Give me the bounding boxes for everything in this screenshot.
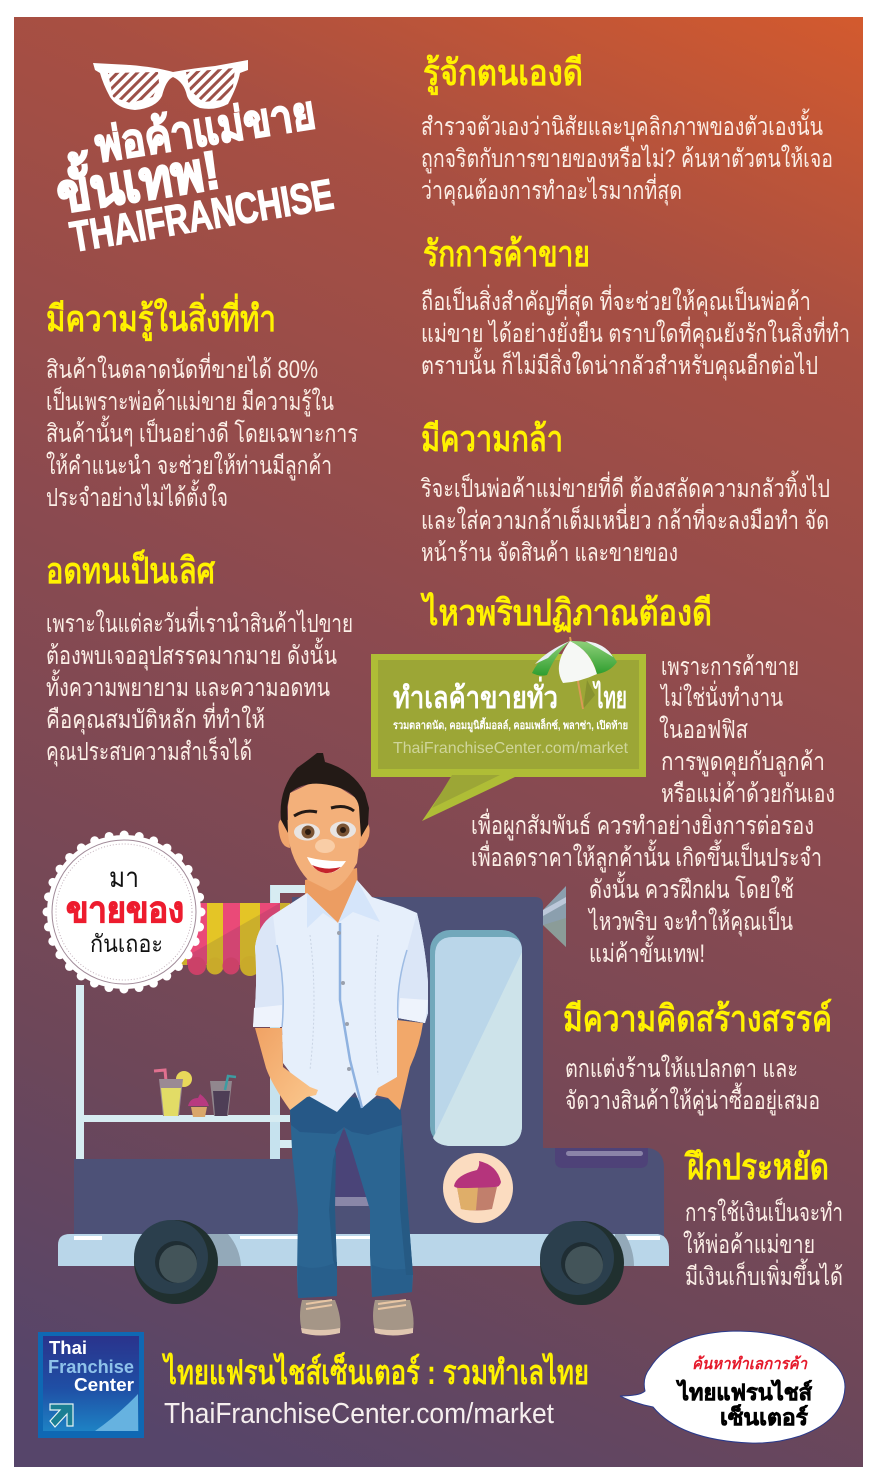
speech bubble ad: ทำเลค้าขายทั่ว	[393, 676, 558, 715]
section: ไหวพริบปฏิภาณต้องดี: การพูดคุยกับลูกค้า	[661, 748, 825, 777]
section: รู้จักตนเองดี: ว่าคุณต้องการทำอะไรมากที่สุด	[421, 173, 682, 206]
footer logo	[38, 1332, 144, 1438]
footer logo: Center	[74, 1375, 134, 1395]
section: ไหวพริบปฏิภาณต้องดี	[420, 591, 835, 968]
icon: sunglasses	[93, 60, 248, 110]
section: มีความคิดสร้างสรรค์	[563, 998, 832, 1116]
section: ฝึกประหยัด: ฝึกประหยัด	[684, 1146, 829, 1187]
footer speech bubble	[620, 1331, 845, 1443]
section: ไหวพริบปฏิภาณต้องดี: แม่ค้าขั้นเทพ!	[589, 935, 705, 968]
section: รักการค้าขาย	[421, 233, 850, 381]
footer url: ThaiFranchiseCenter.com/market	[164, 1398, 554, 1430]
section: อดทนเป็นเลิศ: ทั้งความพยายาม และความอดทน	[46, 669, 330, 702]
speech bubble ad: รวมตลาดนัด, คอมมูนิตี้มอลล์, คอมเพล็กซ์, พลาซ่า, เปิดท้าย	[393, 717, 628, 733]
bumper	[58, 1234, 669, 1266]
section: อดทนเป็นเลิศ: ต้องพบเจออุปสรรคมากมาย ดังนั้น	[46, 637, 337, 671]
title: THAIFRANCHISE	[67, 171, 337, 262]
title: พ่อค้าแม่ขาย	[91, 86, 319, 172]
section: อดทนเป็นเลิศ: คุณประสบความสำเร็จได้	[46, 736, 252, 767]
badge: มา ขายของ กันเถอะ: มา	[109, 862, 139, 893]
speech bubble ad: ThaiFranchiseCenter.com/market	[393, 740, 629, 757]
section: มีความคิดสร้างสรรค์: ตกแต่งร้านให้แปลกตา และ	[565, 1054, 798, 1083]
eyes and brows	[294, 807, 356, 840]
section: ไหวพริบปฏิภาณต้องดี: ไหวพริบ จะทำให้คุณเป็น	[587, 906, 793, 937]
footer headline: ไทยแฟรนไชส์เซ็นเตอร์ : รวมทำเลไทย	[162, 1351, 589, 1392]
section: ไหวพริบปฏิภาณต้องดี: ดังนั้น ควรฝึกฝน โดยใช้	[589, 871, 794, 904]
section: มีความรู้ในสิ่งที่ทำ: สินค้านั้นๆ เป็นอย่างดี โดยเฉพาะการ	[46, 415, 358, 448]
hair	[281, 753, 369, 837]
section: รักการค้าขาย: รักการค้าขาย	[423, 233, 590, 274]
nose	[315, 839, 335, 853]
footer logo: Thai	[49, 1338, 87, 1358]
section: มีความรู้ในสิ่งที่ทำ: ให้คำแนะนำ จะช่วยให้ท่านมีลูกค้า	[46, 451, 332, 481]
neck	[305, 868, 358, 925]
title	[51, 86, 337, 262]
footer speech bubble: เซ็นเตอร์	[720, 1403, 808, 1430]
section: ไหวพริบปฏิภาณต้องดี: เพราะการค้าขาย	[661, 653, 799, 681]
section: รู้จักตนเองดี	[421, 52, 833, 206]
section: อดทนเป็นเลิศ: คือคุณสมบัติหลัก ที่ทำให้	[46, 702, 265, 735]
man character	[253, 753, 428, 1336]
badge: มา ขายของ กันเถอะ	[47, 835, 201, 989]
section: ไหวพริบปฏิภาณต้องดี: ไหวพริบปฏิภาณต้องดี	[420, 591, 712, 633]
truck and market stall illustration	[58, 885, 669, 1305]
badge: มา ขายของ กันเถอะ: ขายของ	[66, 889, 184, 930]
section: อดทนเป็นเลิศ: เพราะในแต่ละวันที่เรานำสินค้าไปขาย	[46, 606, 353, 638]
section: รู้จักตนเองดี: รู้จักตนเองดี	[423, 52, 583, 96]
section: มีความกล้า: มีความกล้า	[421, 418, 563, 459]
truck body	[74, 886, 664, 1240]
section: มีความกล้า: หน้าร้าน จัดสินค้า และขายของ	[421, 539, 678, 567]
forearms and hands	[255, 1020, 423, 1110]
footer logo: Franchise	[48, 1357, 134, 1377]
shirt	[253, 880, 428, 1112]
section: มีความรู้ในสิ่งที่ทำ: เป็นเพราะพ่อค้าแม่ขาย มีความรู้ใน	[46, 386, 334, 417]
jeans	[290, 1095, 413, 1298]
speech bubble ad	[371, 637, 646, 821]
section: ไหวพริบปฏิภาณต้องดี: ไม่ใช่นั่งทำงาน	[659, 680, 783, 712]
face	[288, 782, 361, 891]
ears	[278, 819, 370, 849]
icon: cupcake badge	[443, 1153, 513, 1223]
section: อดทนเป็นเลิศ: อดทนเป็นเลิศ	[46, 548, 216, 591]
section: มีความรู้ในสิ่งที่ทำ: สินค้าในตลาดนัดที่ขายได้ 80%	[46, 352, 318, 384]
rear wheel	[134, 1220, 218, 1304]
speech bubble ad: ไทย	[592, 680, 627, 715]
mouth	[307, 857, 346, 873]
section: อดทนเป็นเลิศ	[46, 548, 353, 767]
front wheel	[540, 1221, 624, 1305]
striped awning	[180, 903, 292, 976]
title: ขั้นเทพ!	[51, 130, 224, 225]
section: มีความกล้า	[421, 418, 830, 567]
section: มีความรู้ในสิ่งที่ทำ: ประจำอย่างไม่ได้ตั้งใจ	[46, 479, 228, 512]
footer speech bubble: ไทยแฟรนไชส์	[676, 1379, 813, 1405]
section: ฝึกประหยัด: ให้พ่อค้าแม่ขาย	[683, 1230, 815, 1259]
shoes	[300, 1300, 414, 1336]
badge: มา ขายของ กันเถอะ: กันเถอะ	[90, 931, 163, 958]
section: มีความรู้ในสิ่งที่ทำ	[46, 293, 358, 512]
footer speech bubble: ค้นหาทำเลการค้า	[692, 1355, 808, 1373]
section: ฝึกประหยัด	[683, 1146, 843, 1291]
drinks and cupcake on shelf	[154, 1070, 236, 1117]
section: ไหวพริบปฏิภาณต้องดี: ในออฟฟิส	[659, 715, 748, 744]
icon: umbrella	[532, 637, 617, 709]
section: มีความรู้ในสิ่งที่ทำ: มีความรู้ในสิ่งที่ทำ	[46, 293, 276, 342]
stall frame	[76, 885, 310, 1160]
